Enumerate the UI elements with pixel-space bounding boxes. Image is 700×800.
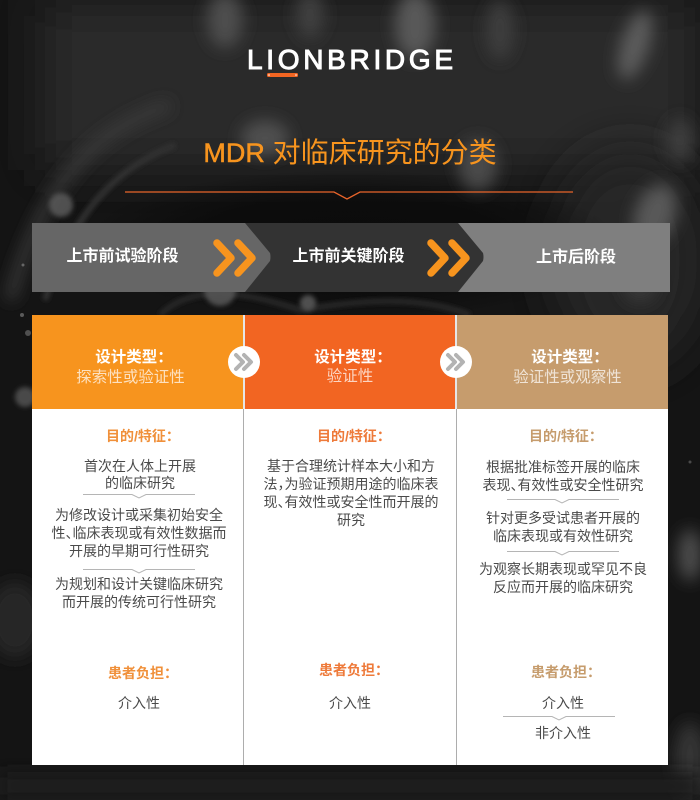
icon: orange double chevron 2 <box>431 243 466 273</box>
text block: approved label: 有效性或安全性研究 <box>518 477 644 493</box>
text block: early feasibility: 性、 <box>52 525 80 541</box>
icon: white circle chevron 1 <box>228 346 260 378</box>
icon: orange double chevron 1 <box>217 243 252 273</box>
text block: pivotal description: 研究 <box>337 512 365 528</box>
text block: pivotal description: 法， <box>264 476 292 492</box>
stage bar <box>32 223 670 292</box>
text block: pivotal description: 基于合理统计样本大小和方 <box>267 458 435 474</box>
text block: approved label: 根据批准标签开展的临床 <box>486 459 640 475</box>
text block: early feasibility: 临床表现或有效性数据而 <box>72 525 226 541</box>
column header: confirmatory: 验证性 <box>327 367 373 385</box>
stage 1: pre-market trial <box>32 223 270 292</box>
text: non-interventional: 非介入性 <box>535 725 591 741</box>
text block: early feasibility: 为修改设计或采集初始安全 <box>55 507 223 523</box>
column header: confirmatory or observational <box>457 315 668 409</box>
title: MDR 对临床研究的分类 <box>203 137 497 168</box>
stage 1: pre-market trial: 上市前试验阶段 <box>66 246 179 265</box>
text: interventional: 介入性 <box>118 695 160 711</box>
header gaps <box>244 315 456 409</box>
column header: confirmatory or observational: 设计类型： <box>531 348 609 366</box>
text block: approved label: 表现、 <box>482 477 524 493</box>
text block: traditional feasibility: 为规划和设计关键临床研究 <box>55 576 223 592</box>
heading: purpose: 目的/特征： <box>106 428 180 444</box>
heading: purpose: 目的/特征： <box>317 428 391 444</box>
stage 2: pivotal: 上市前关键阶段 <box>292 246 405 265</box>
text block: long-term observation: 反应而开展的临床研究 <box>493 579 633 595</box>
icon: white circle chevron 2 <box>440 346 472 378</box>
text block: more patients: 针对更多受试患者开展的 <box>486 510 640 526</box>
text block: more patients: 临床表现或有效性研究 <box>493 528 633 544</box>
column header: confirmatory <box>245 315 455 409</box>
text: interventional: 介入性 <box>542 695 584 711</box>
stage 3: post-market: 上市后阶段 <box>536 247 616 266</box>
text: interventional: 介入性 <box>329 695 371 711</box>
stage 3: post-market <box>458 223 670 292</box>
column header: exploratory: 探索性或验证性 <box>76 368 185 386</box>
text block: pivotal description: 为验证预期用途的临床表 <box>284 476 438 492</box>
text block: pivotal description: 有效性或安全性而开展的 <box>284 494 438 510</box>
text block: pivotal description: 现、 <box>264 494 292 510</box>
column header: exploratory <box>32 315 243 409</box>
column header: confirmatory: 设计类型： <box>314 348 392 366</box>
stage 2: pivotal <box>240 223 484 292</box>
column header: exploratory: 设计类型： <box>95 348 173 366</box>
title underline with notch <box>125 192 573 199</box>
column 2 content <box>264 428 438 711</box>
heading: patient burden: 患者负担： <box>531 664 601 680</box>
text block: early feasibility: 开展的早期可行性研究 <box>69 543 209 559</box>
column 3 content <box>479 428 647 741</box>
heading: patient burden: 患者负担： <box>319 662 389 678</box>
column separators <box>244 409 456 765</box>
text block: first in human: 首次在人体上开展 <box>84 458 196 474</box>
column header: confirmatory or observational: 验证性或观察性 <box>513 368 622 386</box>
text block: long-term observation: 为观察长期表现或罕见不良 <box>479 561 647 577</box>
heading: purpose: 目的/特征： <box>529 428 603 444</box>
text block: first in human: 的临床研究 <box>105 475 175 491</box>
table body panel <box>32 409 668 765</box>
text block: traditional feasibility: 而开展的传统可行性研究 <box>62 594 216 610</box>
logo: Lionbridge: LIONBRIDGE <box>247 44 453 75</box>
heading: patient burden: 患者负担： <box>108 665 178 681</box>
column 1 content <box>52 428 226 711</box>
